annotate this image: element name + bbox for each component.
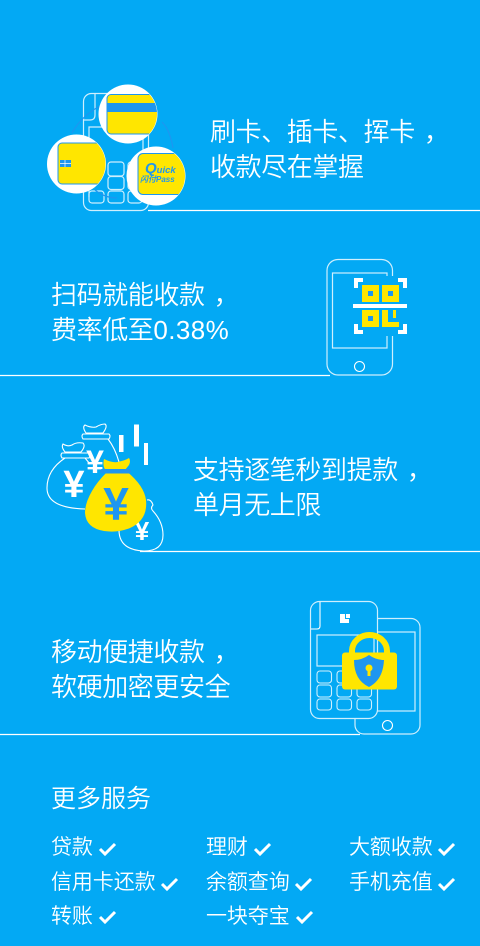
headline: card payment: 收款尽在掌握 [210, 152, 364, 182]
icon: terminal, phone and padlock [310, 602, 420, 734]
service: transfer: 转账 [51, 905, 93, 928]
headline: security: 软硬加密更安全 [51, 672, 230, 702]
icon: money bags: ¥ [63, 464, 85, 506]
service: lucky draw: 一块夺宝 [206, 905, 290, 928]
service: phone top-up: 手机充值 [349, 871, 433, 894]
left bag [47, 443, 90, 509]
chip card [58, 142, 106, 184]
icon: money bags: ¥ [86, 444, 104, 480]
icon: phone with QR code [327, 260, 408, 375]
service list [51, 836, 433, 928]
quickpass card: 闪付Pass [140, 175, 175, 184]
headline: instant withdrawal: 支持逐笔秒到提款 ， [193, 455, 432, 485]
headline: security: 移动便捷收款 ， [51, 637, 239, 667]
right bag [119, 500, 163, 551]
section heading: more services: 更多服务 [51, 785, 151, 813]
divider lines [0, 210, 480, 734]
service: large collection: 大额收款 [349, 836, 433, 859]
icon: card terminal with three cards [47, 84, 198, 210]
headline: card payment [210, 117, 449, 182]
service: wealth: 理财 [206, 836, 248, 859]
check marks [100, 844, 454, 922]
quickpass card: Quick [145, 160, 176, 177]
service: credit card repayment: 信用卡还款 [51, 871, 156, 894]
icon: money bags: ¥ [135, 516, 150, 546]
headline: instant withdrawal [193, 455, 432, 520]
headline: QR payment [51, 280, 239, 345]
top card [106, 94, 157, 134]
service: loans: 贷款 [51, 836, 93, 859]
headline: security [51, 637, 239, 702]
icon: money bags [47, 424, 163, 551]
headline: QR payment: 扫码就能收款 ， [51, 280, 239, 310]
headline: card payment: 刷卡、插卡、挥卡 ， [210, 117, 449, 147]
headline: QR payment: 费率低至0.38% [51, 315, 229, 345]
service: balance inquiry: 余额查询 [206, 871, 290, 894]
falling lines [119, 424, 148, 465]
headline: instant withdrawal: 单月无上限 [193, 490, 321, 520]
icon: money bags: ¥ [103, 478, 129, 530]
quickpass card [138, 153, 185, 195]
back bag [82, 424, 119, 462]
yellow bag [85, 458, 146, 532]
